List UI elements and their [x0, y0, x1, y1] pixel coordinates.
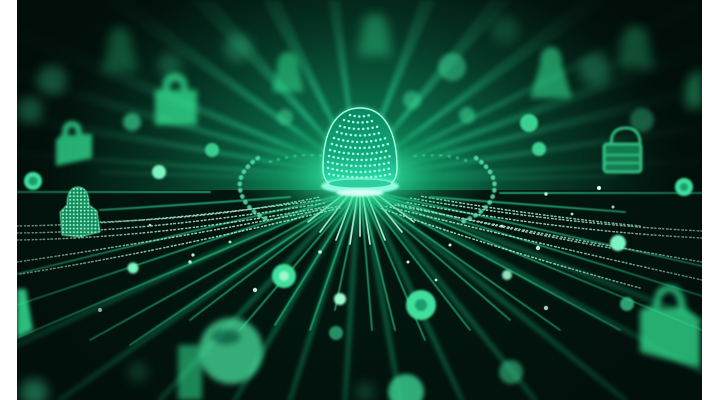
lower floor — [17, 190, 702, 400]
lower data streams — [17, 190, 702, 400]
icon: padlock right — [604, 128, 641, 172]
dome base ring — [321, 178, 399, 194]
icon: padlock far top left — [102, 27, 138, 72]
icon: padlock left edge — [17, 289, 33, 338]
dotted data lines — [17, 196, 702, 288]
icon: sharp dotted padlock — [60, 187, 100, 237]
upper light rays — [17, 0, 702, 180]
left white margin — [0, 0, 17, 400]
orbit ring of dots — [240, 155, 495, 222]
lower edge vignette — [17, 190, 702, 400]
icon: padlock left — [56, 121, 92, 166]
icon: large padlock foreground — [178, 318, 263, 400]
icon: padlock upper left — [155, 73, 197, 125]
central halo — [230, 114, 490, 238]
right white margin — [702, 0, 720, 400]
dome dot rows — [328, 115, 392, 178]
icon: padlock far right — [686, 70, 702, 108]
icon: padlock upper right — [530, 47, 572, 98]
icon: central security dome — [321, 108, 399, 196]
icon: padlock top centre left — [272, 52, 304, 92]
orb sharp left — [24, 172, 42, 190]
scattered light specks — [98, 186, 614, 312]
icon: padlock far top right — [616, 26, 654, 68]
icon: padlock top centre — [358, 14, 392, 56]
icon: padlock lower right — [640, 285, 700, 368]
